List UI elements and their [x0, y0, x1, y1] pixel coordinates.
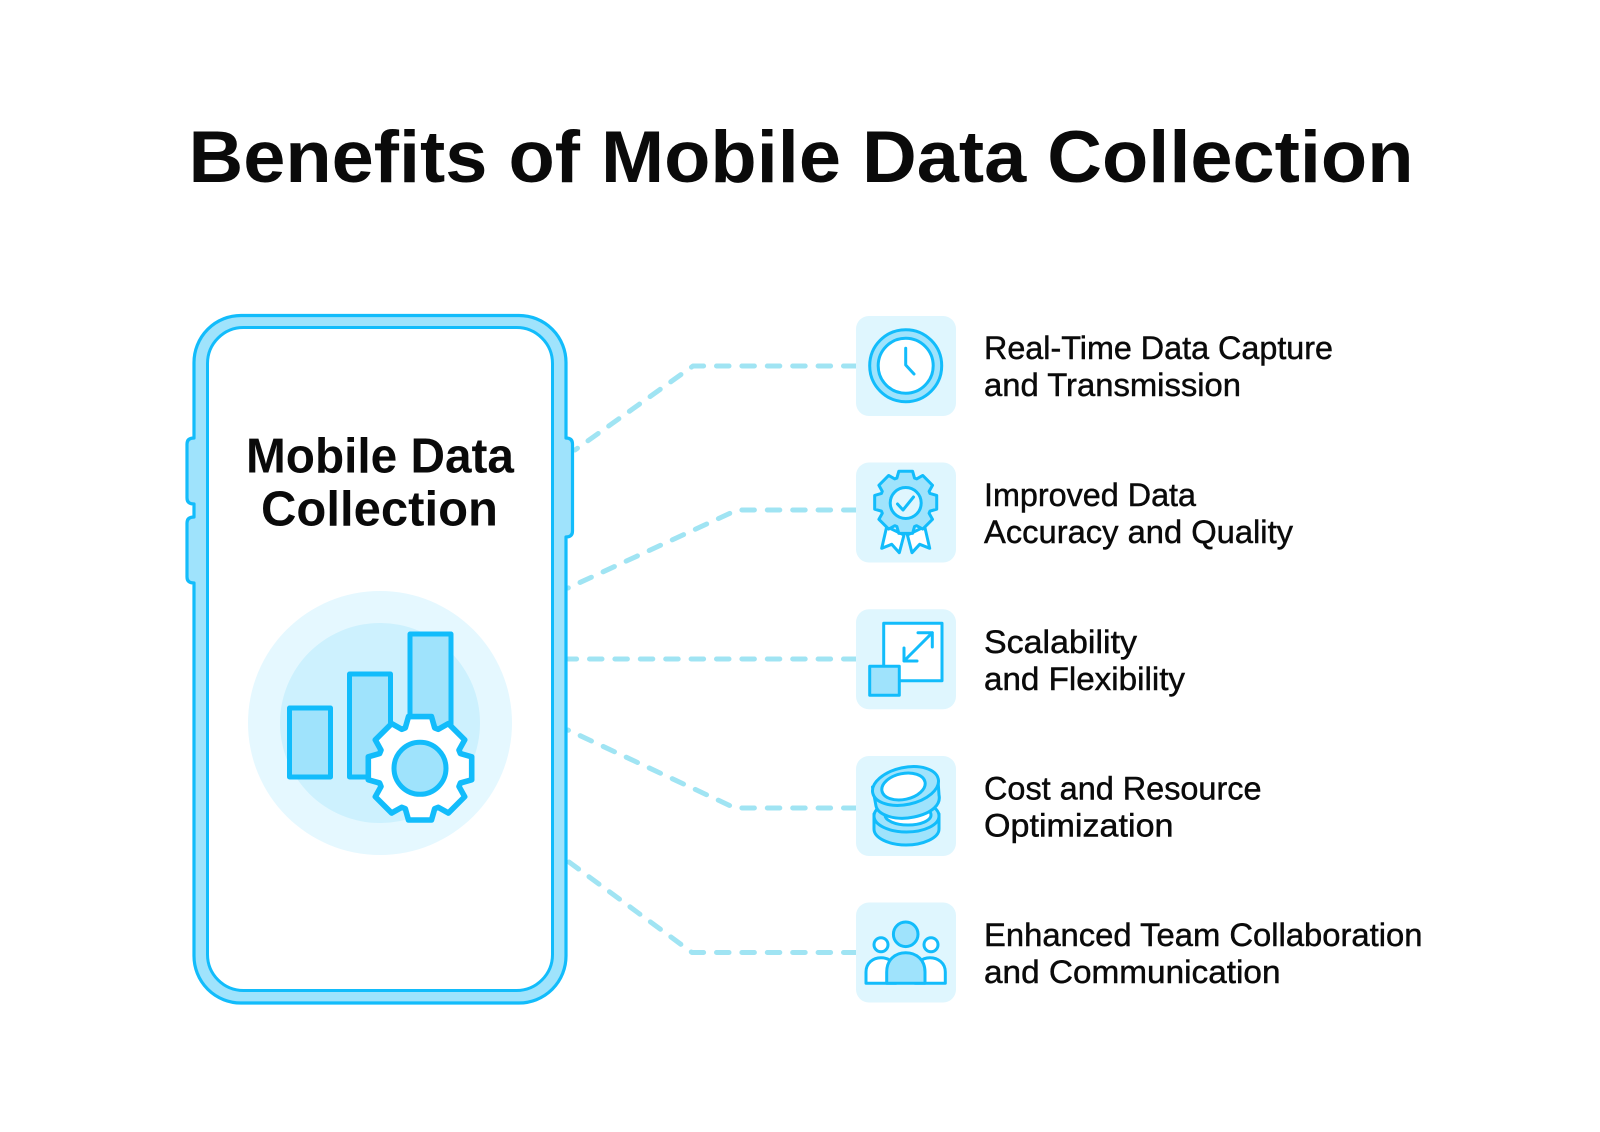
label: scalability: and Flexibility — [984, 661, 1185, 697]
label: real-time capture: and Transmission — [984, 367, 1241, 403]
title: Benefits of Mobile Data Collection — [188, 117, 1414, 198]
icon tile: coin stack — [856, 756, 956, 856]
label: data accuracy: Improved Data — [984, 477, 1196, 513]
label: scalability — [984, 624, 1185, 697]
label: real-time capture: Real-Time Data Capture — [984, 330, 1333, 366]
icon: bar chart with gear — [248, 591, 512, 855]
label: cost optimization: Optimization — [984, 808, 1174, 844]
connector: real-time capture — [575, 366, 856, 450]
benefit: cost optimization — [856, 756, 1262, 856]
label: data accuracy — [984, 477, 1293, 550]
benefit: team collaboration — [856, 902, 1422, 1002]
panel: phone — [187, 316, 572, 1003]
benefit: scalability — [856, 609, 1185, 709]
phone heading: Collection — [261, 482, 498, 536]
benefit: data accuracy — [856, 462, 1293, 562]
icon tile: team — [856, 902, 956, 1002]
label: team collaboration: Enhanced Team Collaboration — [984, 917, 1422, 953]
phone screen — [208, 328, 552, 990]
label: cost optimization — [984, 770, 1262, 844]
phone body with side buttons — [187, 316, 572, 1003]
phone heading: Mobile Data — [246, 430, 515, 484]
label: data accuracy: Accuracy and Quality — [984, 514, 1293, 550]
connector: team collaboration — [569, 862, 856, 952]
label: cost optimization: Cost and Resource — [984, 770, 1262, 806]
icon tile: quality badge — [856, 462, 956, 562]
label: real-time capture — [984, 330, 1333, 403]
label: team collaboration: and Communication — [984, 954, 1280, 990]
benefit: real-time capture — [856, 316, 1333, 416]
label: team collaboration — [984, 917, 1422, 990]
connector: data accuracy — [568, 510, 856, 588]
connector: scalability — [568, 656, 856, 662]
icon tile: resize squares — [856, 609, 956, 709]
connector lines — [568, 366, 856, 952]
label: scalability: Scalability — [984, 624, 1137, 660]
icon tile: clock — [856, 316, 956, 416]
phone heading — [246, 430, 515, 536]
connector: cost optimization — [568, 730, 856, 808]
